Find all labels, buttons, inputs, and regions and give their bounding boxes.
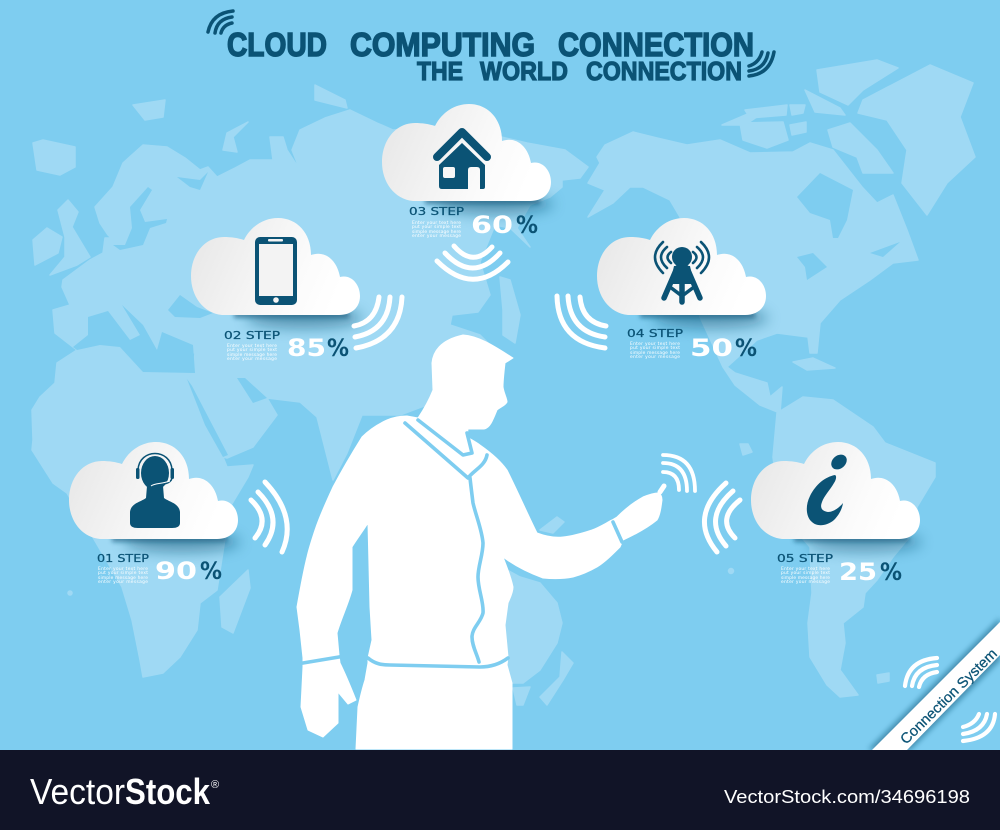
sea: Black Sea: [168, 295, 213, 318]
panel: step 2: [191, 218, 402, 362]
panel: step 3: [382, 104, 553, 279]
map: Cuba: [793, 358, 835, 370]
step label: 02 STEP: [224, 329, 280, 342]
title line 1: COMPUTING: [350, 26, 535, 63]
step description: put your simple text: [98, 570, 148, 576]
map: New Zealand: [540, 652, 573, 705]
percent: [839, 558, 902, 586]
map: Ireland: [33, 228, 62, 265]
sea: Baltic: [113, 187, 167, 250]
cloud soft shadow: [806, 532, 922, 552]
icon: smartphone: [255, 237, 297, 305]
percent: 50: [690, 334, 733, 362]
map: Svalbard: [133, 100, 165, 120]
icon: headset operator: [130, 454, 180, 528]
percent: %: [880, 558, 902, 586]
step description: put your simple text: [227, 347, 277, 353]
cloud: [751, 442, 920, 539]
panel: step 1: [69, 442, 287, 585]
signal arcs: [437, 246, 508, 279]
cloud: [382, 104, 551, 201]
step description: enter your message: [630, 354, 680, 360]
icon: information: [807, 452, 850, 525]
person body: [297, 335, 662, 749]
map: Iceland: [33, 140, 75, 175]
map: Australia: [500, 570, 562, 683]
step description: enter your message: [781, 579, 830, 585]
banner strip: [872, 622, 1000, 750]
corner banner: [868, 618, 1000, 750]
map: Devon Island: [790, 105, 805, 115]
jacket zip seam: [470, 478, 483, 662]
step description: Enter your text here: [227, 343, 277, 349]
title line 2: THE: [417, 56, 463, 86]
step description: [781, 566, 830, 585]
map: Baffin Island: [828, 123, 893, 173]
map: North America: [588, 132, 918, 413]
step description: Enter your text here: [630, 341, 680, 347]
map: Madagascar: [220, 570, 250, 633]
icon: title signal right: [749, 52, 774, 76]
step description: enter your message: [227, 356, 277, 362]
step description: simple message here: [781, 575, 830, 581]
step description: [630, 341, 680, 360]
sea: Hudson Bay: [797, 173, 853, 238]
percent: %: [327, 334, 349, 362]
icon: title signal left: [208, 11, 233, 33]
jacket hem: [368, 658, 508, 667]
footer bar: [0, 750, 1000, 830]
map: Africa: [32, 347, 253, 677]
map: Falkland Islands: [877, 673, 889, 683]
footer id: VectorStock.com/34696198: [724, 786, 970, 807]
cloud tight shadow: [640, 312, 755, 318]
step description: simple message here: [98, 575, 148, 581]
step description: simple message here: [630, 350, 680, 356]
cloud soft shadow: [437, 194, 553, 214]
signal from hand: [663, 455, 695, 491]
map: Greenland: [858, 65, 975, 215]
left cuff: [303, 657, 339, 663]
map: Banks Island: [722, 108, 770, 125]
footer logo: [30, 771, 219, 812]
map: Prince of Wales: [805, 90, 845, 115]
world map: [32, 60, 975, 705]
step label: 05 STEP: [777, 552, 833, 565]
percent: 60: [471, 211, 513, 239]
icon: house: [437, 132, 487, 189]
step description: enter your message: [98, 579, 148, 585]
title line 1: CONNECTION: [558, 26, 754, 63]
footer logo: Stock: [125, 771, 211, 812]
map: Eurasia: [53, 110, 588, 480]
jacket collar seam: [405, 420, 487, 478]
title line 2: WORLD: [480, 56, 568, 86]
map: Franz Josef Land: [315, 85, 347, 108]
map: small island east: [728, 568, 734, 574]
percent: 25: [839, 558, 877, 586]
percent: %: [735, 334, 757, 362]
sea: Great Lakes: [797, 253, 827, 280]
step label: 04 STEP: [627, 327, 683, 340]
step label: 03 STEP: [409, 205, 464, 218]
step description: enter your message: [412, 233, 461, 239]
percent: %: [516, 211, 538, 239]
cloud tight shadow: [425, 198, 540, 204]
map: Ellesmere Island: [817, 60, 898, 105]
step description: simple message here: [412, 229, 461, 235]
cloud: [191, 218, 360, 315]
title: [208, 11, 774, 86]
step description: simple message here: [227, 352, 277, 358]
cloud soft shadow: [124, 532, 240, 552]
step description: Enter your text here: [98, 566, 148, 572]
map: Tasmania: [513, 687, 530, 705]
step description: put your simple text: [412, 224, 461, 230]
banner label: Connection System: [898, 646, 1000, 748]
footer logo: Vector: [30, 771, 125, 812]
percent: 85: [287, 334, 326, 362]
title line 1: CLOUD: [227, 26, 327, 63]
cloud tight shadow: [234, 312, 349, 318]
map: South America: [773, 397, 935, 697]
title line 2: CONNECTION: [586, 56, 742, 86]
icon: radio tower: [655, 242, 709, 302]
signal arcs: [704, 483, 740, 552]
step description: [412, 220, 461, 239]
signal arcs: [557, 296, 606, 348]
step description: [227, 343, 277, 362]
cloud soft shadow: [246, 308, 362, 328]
footer logo: ®: [211, 779, 219, 791]
map: inland seas: [73, 172, 900, 457]
map: small island west: [68, 591, 72, 595]
map: Somerset Island: [790, 122, 806, 135]
step description: put your simple text: [781, 570, 830, 576]
sea: Mediterranean: [73, 305, 195, 373]
percent: 90: [155, 557, 197, 585]
map: Galapagos: [740, 444, 752, 455]
cloud: [597, 218, 766, 315]
sea: Red Sea: [187, 379, 228, 457]
sea: Persian Gulf: [237, 378, 267, 403]
step description: Enter your text here: [412, 220, 461, 226]
panel: step 4: [557, 218, 768, 362]
map: New Guinea: [540, 517, 564, 533]
percent: [471, 211, 538, 239]
step label: 01 STEP: [97, 552, 149, 565]
person silhouette: [297, 335, 664, 749]
percent: [155, 557, 222, 585]
signal arcs: [354, 297, 402, 348]
cloud tight shadow: [112, 536, 227, 542]
percent: %: [200, 557, 222, 585]
banner shadow: [868, 618, 1000, 750]
percent: [287, 334, 349, 362]
title line 2: [417, 56, 742, 86]
map: Novaya Zemlya: [223, 122, 248, 152]
step description: [98, 566, 148, 585]
panel: step 5: [704, 442, 922, 586]
title line 1: [227, 26, 754, 63]
sea: White Sea: [177, 172, 208, 190]
icon: corner signal bottom: [963, 714, 995, 741]
cloud tight shadow: [794, 536, 909, 542]
step description: put your simple text: [630, 345, 680, 351]
cloud: [69, 442, 238, 539]
step description: Enter your text here: [781, 566, 830, 572]
sea: Gulf of St Lawrence: [870, 242, 900, 257]
percent: [690, 334, 757, 362]
map: Victoria Island: [740, 122, 788, 148]
map: Arctic islands: [745, 105, 787, 118]
signal arcs: [251, 482, 287, 552]
right cuff: [613, 522, 622, 542]
map: Great Britain: [50, 200, 90, 275]
handheld device: [660, 486, 664, 492]
map: Japan: [500, 277, 520, 343]
cloud soft shadow: [652, 308, 768, 328]
icon: corner signal top: [905, 658, 937, 687]
